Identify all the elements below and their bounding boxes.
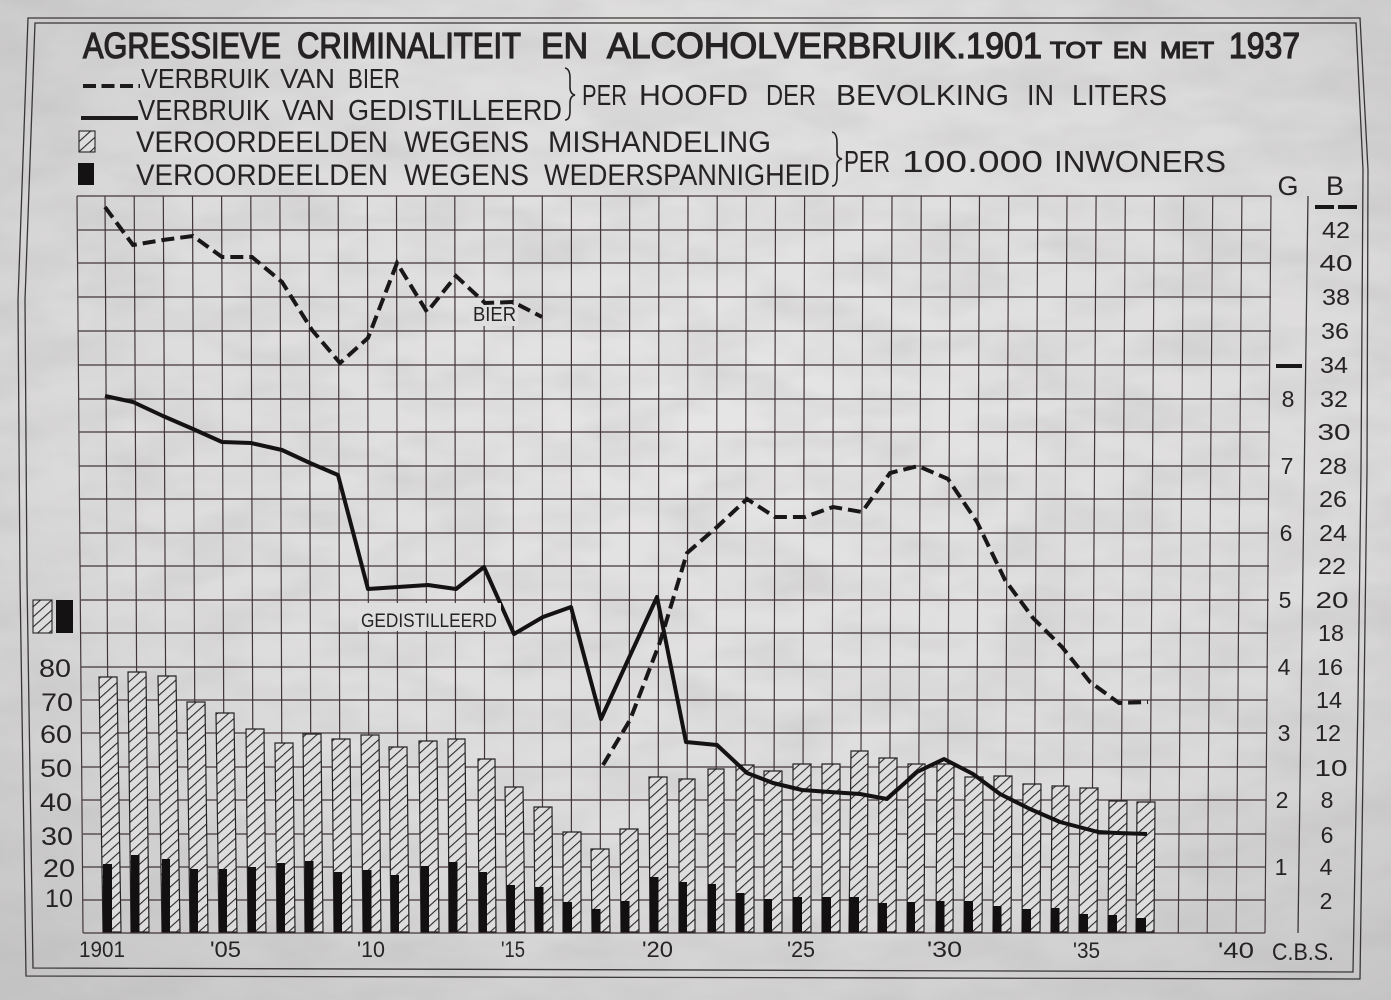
right axis key: B dashed: [1315, 205, 1357, 209]
legend: resisting authority label: WEGENS: [404, 159, 529, 192]
legend: beer label: [141, 63, 400, 94]
legend: distilled solid line: [81, 116, 138, 120]
legend: black swatch: [78, 163, 94, 185]
axis divider between G and B scales: [1298, 196, 1308, 933]
right axis labels: B scale: 8: [1321, 787, 1333, 813]
right axis labels: B scale: 34: [1320, 352, 1348, 378]
title: EN: [1113, 37, 1147, 63]
right axis labels: B scale: 28: [1319, 453, 1347, 479]
line: beer consumption 1901-1916: [105, 207, 542, 363]
legend: distilled label: GEDISTILLEERD: [348, 95, 562, 127]
legend: [78, 63, 1226, 192]
left axis labels: per 100.000: 30: [41, 823, 73, 851]
right axis labels: B scale: 24: [1319, 520, 1347, 546]
right axis labels: B scale: 20: [1316, 587, 1348, 613]
right axis labels: G scale: 3: [1278, 720, 1290, 746]
legend: assault label: MISHANDELING: [548, 126, 771, 159]
unit: per capita in liters: [582, 80, 1167, 112]
right axis key: G solid: [1276, 364, 1302, 368]
right axis labels: G scale: [1275, 386, 1294, 880]
right axis labels: G scale: 4: [1278, 654, 1291, 680]
right axis labels: B scale: 26: [1319, 486, 1347, 512]
title: [83, 25, 1300, 66]
right axis labels: B scale: [1314, 217, 1352, 914]
right axis labels: G scale: 5: [1279, 587, 1291, 613]
label: BIER: BIER: [473, 304, 516, 326]
x axis labels: years: '35: [1073, 938, 1100, 963]
legend: distilled label: VAN: [282, 95, 335, 127]
left axis labels: per 100.000: 80: [39, 655, 71, 683]
legend: beer label: VAN: [280, 63, 335, 94]
brace: per 100000: [832, 132, 842, 186]
title: 1901: [966, 25, 1042, 66]
title: AGRESSIEVE: [83, 25, 281, 66]
right axis labels: G scale: 6: [1280, 520, 1292, 546]
x axis labels: years: 1901: [79, 937, 125, 962]
right axis labels: B scale: 2: [1320, 888, 1332, 914]
left axis labels: per 100.000: 50: [40, 755, 72, 783]
left axis labels: per 100.000: 10: [45, 885, 73, 913]
label: GEDISTILLEERD: [358, 603, 501, 632]
legend: assault label: VEROORDEELDEN: [136, 126, 388, 159]
right axis labels: B scale: 22: [1318, 553, 1346, 579]
right axis labels: G scale: 8: [1282, 386, 1294, 412]
right axis labels: B scale: 10: [1314, 755, 1348, 781]
left axis labels: per 100.000: 20: [43, 855, 75, 883]
left axis labels: per 100.000: 70: [41, 689, 73, 717]
unit: per capita in liters: DER: [766, 80, 816, 112]
right axis labels: B scale: 42: [1322, 217, 1350, 243]
right axis labels: B scale: 36: [1321, 318, 1349, 344]
right axis labels: B scale: 38: [1322, 284, 1350, 310]
right axis labels: B scale: 6: [1321, 822, 1333, 848]
x axis labels: years: '20: [642, 937, 673, 962]
right axis labels: G scale: 7: [1281, 453, 1293, 479]
right axis labels: G scale: 1: [1275, 854, 1287, 880]
x axis labels: years: [79, 937, 1254, 963]
title: ALCOHOLVERBRUIK.: [607, 25, 966, 66]
title: MET: [1160, 37, 1214, 63]
left axis labels: per 100.000: [39, 655, 75, 913]
chart: grid: [77, 196, 1271, 933]
legend: beer label: BIER: [348, 63, 400, 94]
legend: resisting authority label: WEDERSPANNIGHEID: [544, 159, 830, 192]
right axis labels: B scale: 32: [1320, 386, 1348, 412]
x axis labels: years: '30: [927, 937, 962, 962]
label: GEDISTILLEERD: GEDISTILLEERD: [361, 611, 497, 632]
x axis labels: years: '10: [357, 937, 385, 962]
right axis heading: B: B: [1326, 171, 1344, 201]
unit: per capita in liters: PER: [582, 80, 627, 112]
right axis labels: B scale: 40: [1320, 250, 1352, 276]
source: C.B.S.: C.B.S.: [1272, 939, 1334, 966]
legend: distilled label: VERBRUIK: [138, 95, 271, 127]
x axis labels: years: '25: [787, 937, 815, 962]
right axis labels: B scale: 18: [1318, 620, 1344, 646]
bars: convicted of resisting authority (black): [103, 855, 1146, 932]
right axis heading: G: G: [1277, 171, 1299, 201]
left axis labels: per 100.000: 60: [40, 721, 72, 749]
legend: resisting authority label: VEROORDEELDEN: [136, 159, 388, 192]
legend: assault label: WEGENS: [404, 126, 529, 159]
x axis labels: years: '40: [1218, 938, 1254, 963]
unit: per 100000 inhabitants: INWONERS: [1054, 144, 1226, 179]
legend: beer dashed line: [83, 84, 140, 88]
left scale legend swatches: [33, 600, 73, 633]
x axis labels: years: '15: [501, 937, 525, 962]
right axis labels: B scale: 16: [1317, 654, 1343, 680]
right axis labels: G scale: 2: [1276, 787, 1288, 813]
unit: per capita in liters: IN: [1027, 80, 1054, 112]
right axis labels: B scale: 14: [1316, 687, 1342, 713]
legend: distilled label: [138, 95, 562, 127]
brace: per capita: [565, 68, 575, 120]
legend: resisting authority label: [136, 159, 830, 192]
unit: per 100000 inhabitants: [844, 144, 1226, 179]
title: 1937: [1229, 25, 1300, 66]
unit: per 100000 inhabitants: PER: [844, 144, 890, 179]
right axis labels: B scale: 12: [1315, 720, 1341, 746]
unit: per 100000 inhabitants: 100.000: [902, 144, 1043, 179]
legend: hatched swatch: [79, 131, 95, 152]
title: TOT: [1050, 37, 1102, 63]
bars: convicted of assault (hatched): [99, 672, 1155, 932]
right axis labels: B scale: 4: [1320, 854, 1333, 880]
unit: per capita in liters: HOOFD: [639, 80, 748, 112]
legend: beer label: VERBRUIK: [141, 63, 270, 94]
unit: per capita in liters: BEVOLKING: [836, 80, 1009, 112]
left axis labels: per 100.000: 40: [40, 789, 72, 817]
legend: assault label: [136, 126, 771, 159]
line: distilled spirits consumption: [105, 396, 1147, 834]
line: beer consumption 1918-1937: [603, 466, 1148, 765]
x axis labels: years: '05: [210, 937, 241, 962]
right axis labels: B scale: 30: [1318, 419, 1350, 445]
title: CRIMINALITEIT: [297, 25, 521, 66]
title: EN: [541, 25, 588, 66]
unit: per capita in liters: LITERS: [1072, 80, 1167, 112]
